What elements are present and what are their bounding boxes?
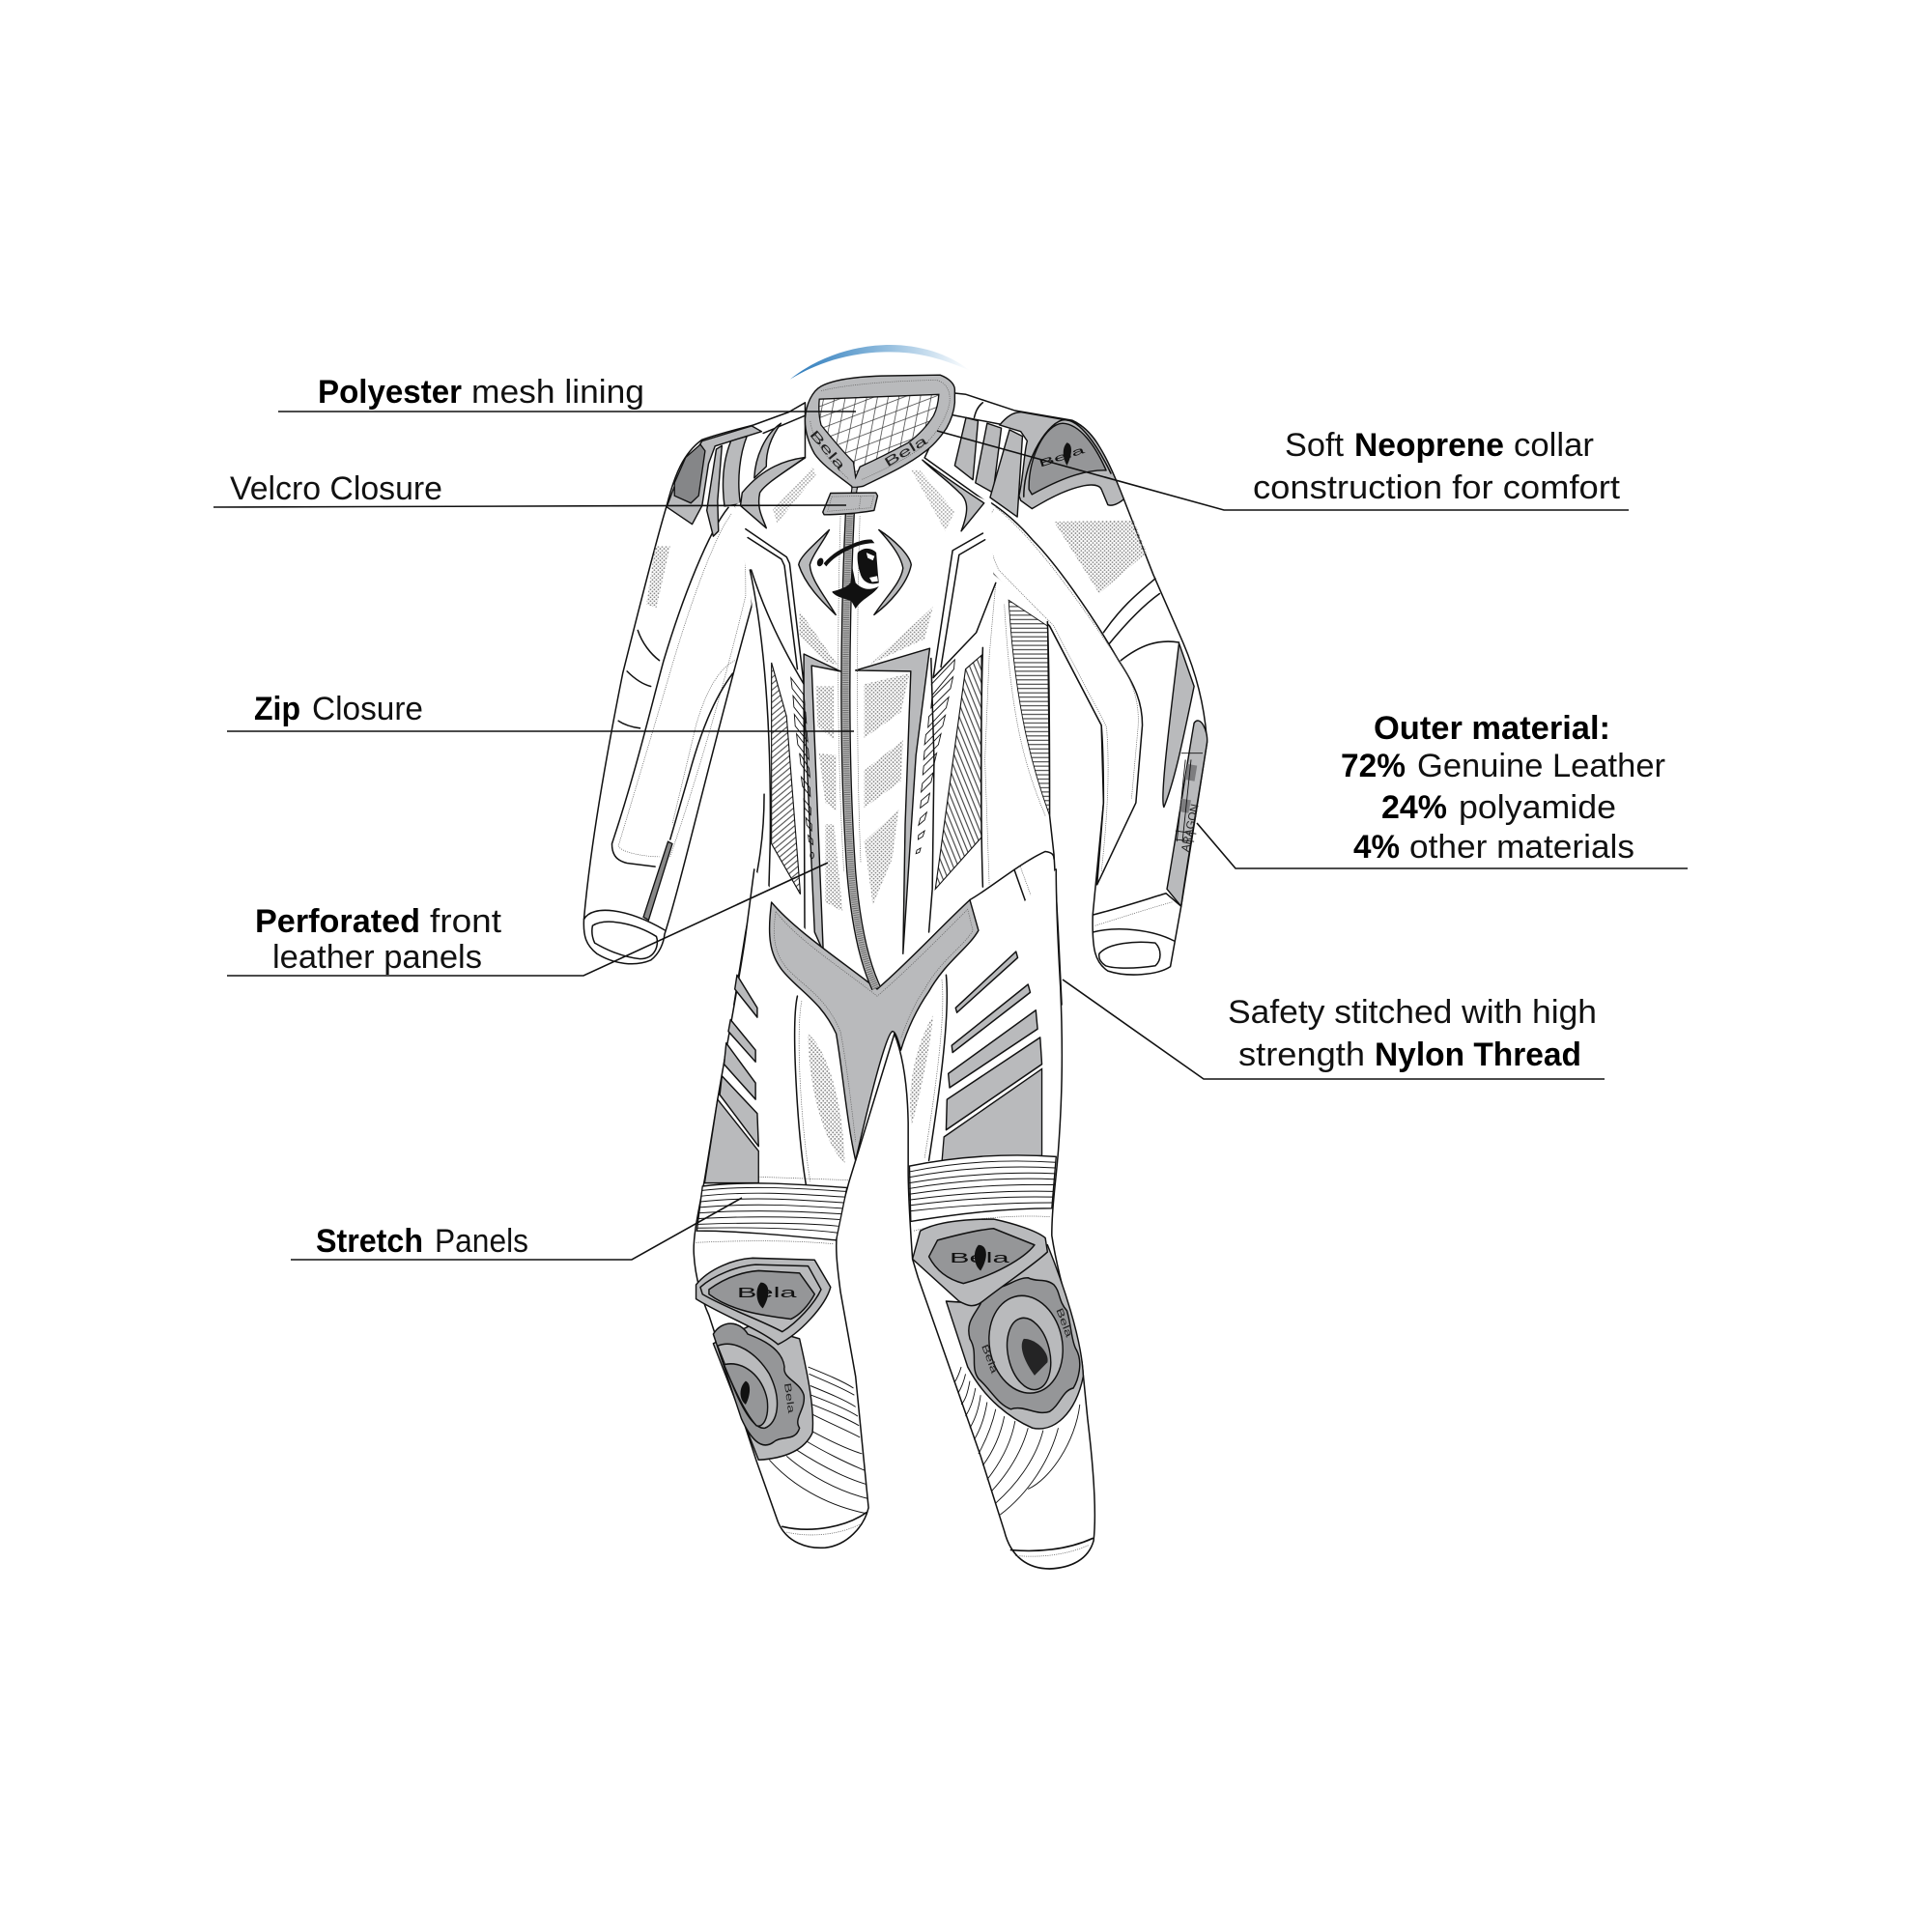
chest seams	[746, 529, 804, 684]
mesh lining	[819, 394, 939, 477]
right thigh stripes	[955, 952, 1018, 1012]
wrist panel with label: ARAGON	[1179, 803, 1202, 853]
left knee puck: Bela	[781, 1382, 796, 1414]
chest wedges	[741, 457, 805, 528]
callout: Stretch Panels: Stretch	[316, 1223, 423, 1260]
wrist panel with label	[1167, 721, 1208, 906]
left thigh stripes	[735, 975, 757, 1017]
right knee puck	[946, 1245, 1083, 1429]
callout: Outer material composition	[1197, 710, 1688, 868]
callout: Zip Closure: Closure	[312, 691, 423, 727]
right shoulder stripes	[954, 417, 978, 480]
crotch grey panel	[770, 900, 979, 1160]
right hatched side panel	[935, 655, 981, 889]
shoulder slider with logo: Bela	[1037, 444, 1086, 470]
ladder vents right	[916, 660, 954, 854]
callout: Soft Neoprene collar: collar	[1514, 427, 1594, 464]
callout: Outer material composition: 72%	[1341, 748, 1406, 784]
perforated chest panels	[773, 467, 954, 912]
callout: Polyester mesh lining: mesh lining	[471, 374, 644, 411]
left knee slider: Bela	[737, 1285, 797, 1300]
left cuff	[583, 910, 665, 930]
left knee slider	[696, 1258, 831, 1345]
right cuff	[1093, 894, 1181, 915]
left stretch band	[696, 1183, 847, 1240]
callout: Perforated front leather panels	[227, 863, 828, 976]
right shoulder pad	[1000, 412, 1123, 509]
centre grey frame	[804, 654, 840, 952]
left shoulder pad	[667, 426, 761, 525]
callout: Safety stitched Nylon Thread: Nylon Thread	[1375, 1037, 1581, 1073]
callout: Stretch Panels: Panels	[435, 1223, 528, 1260]
callout: Outer material composition: Genuine Leather	[1417, 748, 1665, 784]
forearm grey sliver	[1163, 643, 1194, 808]
front arm panel	[983, 503, 1143, 885]
callout: Zip Closure	[227, 691, 854, 731]
callout: Soft Neoprene collar: Soft	[1285, 427, 1345, 464]
callout: Soft Neoprene collar	[937, 427, 1629, 510]
chest bear logo	[799, 529, 911, 614]
right arm	[924, 393, 1208, 975]
callout: Perforated front leather panels: Perforated	[255, 903, 420, 940]
left lower leg lines	[769, 1367, 867, 1514]
callout: Velcro Closure: Velcro Closure	[230, 470, 442, 507]
right lower leg lines	[954, 1367, 1080, 1515]
left/right hip lines	[970, 851, 1054, 899]
torso	[734, 457, 1062, 1005]
callout: Polyester mesh lining: Polyester	[318, 374, 462, 411]
legs	[694, 869, 1094, 1569]
right knee slider: Bela	[950, 1250, 1009, 1265]
callout: Outer material composition: 24%	[1381, 789, 1447, 826]
centre zipper	[838, 512, 876, 988]
racing suit illustration	[583, 345, 1208, 1569]
left arm	[583, 403, 805, 964]
ladder vents left	[791, 678, 813, 859]
callout: Stretch Panels	[291, 1198, 742, 1260]
callout: Polyester mesh lining	[278, 374, 856, 412]
callout: Outer material composition: Outer material:	[1374, 710, 1610, 747]
callout: Zip Closure: Zip	[254, 691, 300, 727]
shoulder slider with logo	[1029, 423, 1106, 495]
puck lettering left: Bela	[979, 1343, 999, 1376]
callout: Outer material composition: other materials	[1409, 829, 1634, 866]
collar brand mark right: Bela	[882, 433, 930, 469]
callout: Safety stitched Nylon Thread	[1063, 980, 1605, 1079]
collar	[805, 375, 954, 491]
callout: Safety stitched Nylon Thread: strength	[1238, 1037, 1365, 1073]
callout: Perforated front leather panels: front	[430, 903, 502, 940]
right leg	[895, 869, 1094, 1569]
collar brand mark left: Bela	[807, 427, 849, 473]
callout: Safety stitched Nylon Thread: Safety stitched with high	[1228, 994, 1597, 1031]
left leg	[694, 869, 895, 1548]
left knee puck	[713, 1323, 812, 1460]
right knee slider	[913, 1219, 1047, 1306]
callout: Perforated front leather panels: leather panels	[272, 939, 482, 976]
right stretch band	[909, 1155, 1056, 1221]
callout: Outer material composition: polyamide	[1459, 789, 1616, 826]
shoulders	[667, 412, 1123, 536]
callout: Outer material composition: 4%	[1353, 829, 1400, 866]
callout: Soft Neoprene collar: construction for comfort	[1253, 469, 1621, 506]
callout: Soft Neoprene collar: Neoprene	[1354, 427, 1504, 464]
blue collar arc	[790, 345, 970, 380]
left hatched side panel	[772, 663, 801, 895]
sleeve zipper	[643, 841, 672, 920]
velcro closure tab	[823, 487, 877, 515]
right knee puck: Bela	[1054, 1307, 1073, 1340]
side stretch hatch right	[1009, 600, 1050, 815]
